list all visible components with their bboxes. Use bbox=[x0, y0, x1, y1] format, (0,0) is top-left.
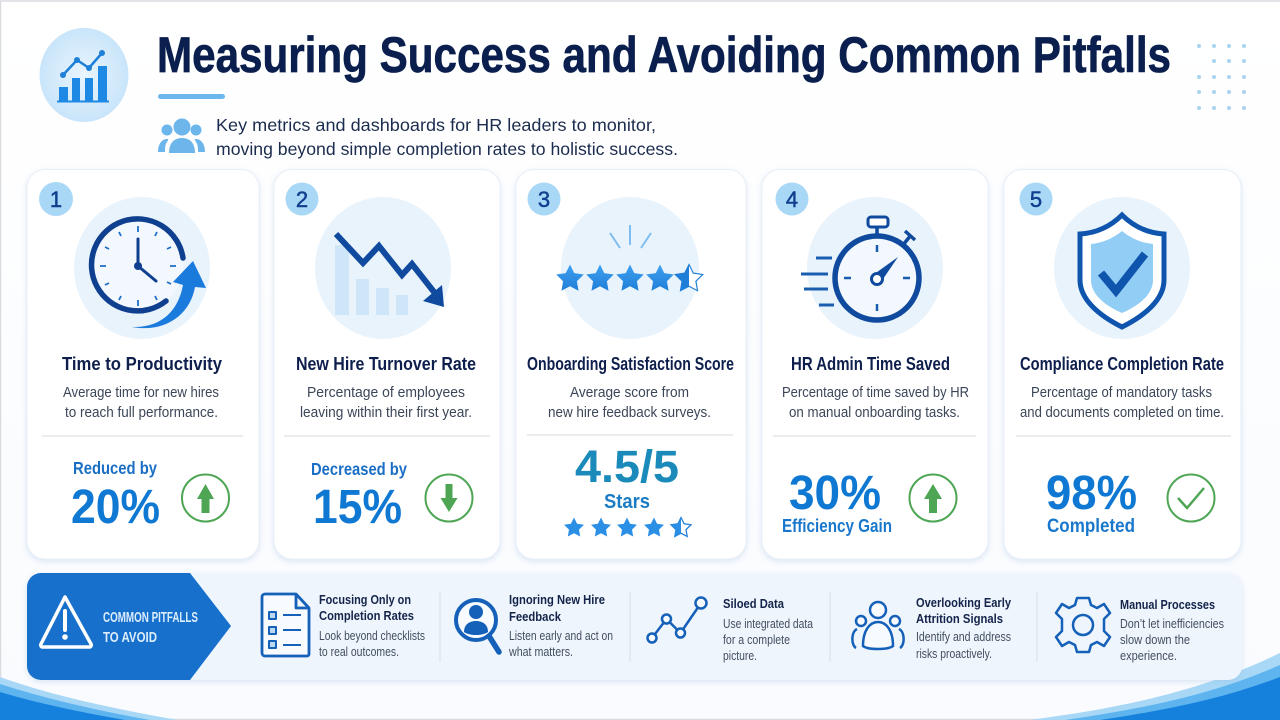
icon: magnifier person bbox=[456, 600, 499, 652]
description bbox=[782, 385, 969, 421]
description: on manual onboarding tasks. bbox=[789, 405, 960, 421]
icon: up arrow bbox=[910, 474, 956, 522]
pitfall text: Attrition Signals bbox=[916, 611, 1003, 626]
badge 3 bbox=[528, 182, 560, 216]
description: and documents completed on time. bbox=[1020, 405, 1224, 421]
pitfall text: Feedback bbox=[509, 609, 562, 624]
header icon: chart in circle bbox=[40, 28, 128, 122]
pitfall text: Identify and address bbox=[916, 630, 1011, 644]
pitfall text: Focusing Only on bbox=[319, 592, 411, 607]
description: Average time for new hires bbox=[63, 385, 219, 401]
heading: Compliance Completion Rate bbox=[1020, 354, 1224, 374]
pitfall text: picture. bbox=[723, 649, 757, 663]
pitfall text: Look beyond checklists bbox=[319, 629, 425, 643]
icon: checklist bbox=[262, 594, 309, 656]
metric: reduced by 20%: 20% bbox=[71, 481, 160, 534]
metric: 98% completed: 98% bbox=[1046, 467, 1137, 520]
icon: stopwatch bbox=[801, 197, 943, 339]
badge 2 bbox=[286, 182, 318, 216]
description: new hire feedback surveys. bbox=[548, 405, 711, 421]
banner text: COMMON PITFALLS bbox=[103, 610, 198, 626]
pitfall 2 bbox=[456, 592, 613, 659]
description bbox=[63, 385, 219, 421]
pitfall 3 bbox=[648, 596, 813, 663]
pitfall text: Don’t let inefficiencies bbox=[1120, 617, 1224, 631]
pitfall text: Manual Processes bbox=[1120, 597, 1215, 612]
description: Percentage of employees bbox=[307, 385, 465, 401]
icon: clock with arrow bbox=[74, 197, 210, 339]
heading: HR Admin Time Saved bbox=[791, 354, 950, 374]
description bbox=[1020, 385, 1224, 421]
metric: decreased by 15% bbox=[311, 459, 407, 534]
icon: up arrow bbox=[182, 474, 229, 522]
badge 2: 2 bbox=[296, 187, 308, 212]
badge 5 bbox=[1020, 182, 1052, 216]
icon: check bbox=[1168, 474, 1214, 522]
metric: 30% efficiency gain: Efficiency Gain bbox=[782, 516, 892, 536]
description bbox=[300, 385, 472, 421]
pitfall 4 bbox=[852, 595, 1012, 661]
icon: connected line bbox=[648, 598, 706, 642]
subtitle: Key metrics and dashboards for HR leaders to monitor, bbox=[216, 115, 656, 135]
icon: down arrow bbox=[426, 474, 472, 522]
panel: hr admin time saved bbox=[762, 170, 988, 559]
pitfall text: Use integrated data bbox=[723, 617, 813, 631]
description: Percentage of mandatory tasks bbox=[1031, 385, 1212, 401]
banner text bbox=[103, 610, 198, 646]
badge 4 bbox=[776, 182, 808, 216]
icon: gear bbox=[1056, 598, 1110, 652]
heading: Onboarding Satisfaction Score bbox=[527, 354, 734, 374]
metric: decreased by 15%: Decreased by bbox=[311, 459, 407, 479]
pitfall text bbox=[508, 592, 613, 659]
metric: 4.5/5 stars bbox=[564, 441, 691, 536]
banner text: TO AVOID bbox=[103, 630, 157, 646]
pitfall text bbox=[723, 596, 813, 663]
pitfall text: Overlooking Early bbox=[916, 595, 1012, 610]
icon: stars bbox=[556, 197, 703, 339]
pitfall text: Completion Rates bbox=[319, 608, 414, 623]
pitfall text bbox=[916, 595, 1012, 661]
badge 4: 4 bbox=[786, 187, 798, 212]
badge 3: 3 bbox=[538, 187, 550, 212]
subtitle: moving beyond simple completion rates to holistic success. bbox=[216, 139, 678, 159]
pitfall text bbox=[319, 592, 425, 659]
pitfall text: Ignoring New Hire bbox=[509, 592, 605, 607]
pitfall 1 bbox=[262, 592, 425, 659]
heading: Time to Productivity bbox=[62, 354, 222, 374]
icon: falling trend bbox=[315, 197, 451, 339]
pitfall text: experience. bbox=[1120, 649, 1177, 663]
panel: new hire turnover bbox=[274, 170, 500, 559]
icon: shield bbox=[1054, 197, 1190, 339]
icon: team bbox=[852, 602, 904, 649]
description bbox=[548, 385, 711, 421]
pitfalls arrow banner bbox=[27, 573, 231, 680]
metric: reduced by 20%: Reduced by bbox=[73, 458, 157, 478]
subtitle bbox=[216, 115, 678, 159]
title accent bar bbox=[158, 94, 225, 99]
metric: 30% efficiency gain bbox=[782, 467, 892, 536]
description: leaving within their first year. bbox=[300, 405, 472, 421]
pitfall 5 bbox=[1056, 597, 1224, 663]
bottom wave right bbox=[1030, 653, 1280, 720]
badge 1: 1 bbox=[50, 187, 62, 212]
pitfall text: for a complete bbox=[723, 633, 790, 647]
badge 5: 5 bbox=[1030, 187, 1042, 212]
panel: onboarding satisfaction bbox=[516, 170, 746, 559]
pitfall text: Siloed Data bbox=[723, 596, 785, 611]
metric: 4.5/5 stars: 4.5/5 bbox=[575, 441, 679, 492]
metric: 30% efficiency gain: 30% bbox=[789, 467, 881, 520]
pitfall text: to real outcomes. bbox=[319, 645, 399, 659]
pitfall text: what matters. bbox=[508, 645, 573, 659]
metric: 4.5/5 stars: Stars bbox=[604, 491, 650, 513]
metric: reduced by 20% bbox=[71, 458, 160, 534]
icon: people bbox=[158, 118, 205, 153]
heading: New Hire Turnover Rate bbox=[296, 354, 476, 374]
dot pattern bbox=[1197, 44, 1246, 110]
metric: 98% completed: Completed bbox=[1047, 516, 1135, 537]
pitfall text bbox=[1120, 597, 1224, 663]
description: Average score from bbox=[570, 385, 689, 401]
badge 1 bbox=[39, 182, 73, 216]
pitfall text: slow down the bbox=[1120, 633, 1190, 647]
icon: warning triangle bbox=[41, 597, 91, 647]
panel: compliance completion bbox=[1004, 170, 1241, 559]
description: to reach full performance. bbox=[65, 405, 218, 421]
metric: decreased by 15%: 15% bbox=[313, 481, 402, 534]
pitfall text: Listen early and act on bbox=[509, 629, 613, 643]
pitfall text: risks proactively. bbox=[916, 647, 992, 661]
description: Percentage of time saved by HR bbox=[782, 385, 969, 401]
bottom wave left bbox=[0, 677, 178, 720]
panel: time to productivity bbox=[27, 170, 259, 559]
panel: common pitfalls bbox=[27, 573, 1242, 680]
